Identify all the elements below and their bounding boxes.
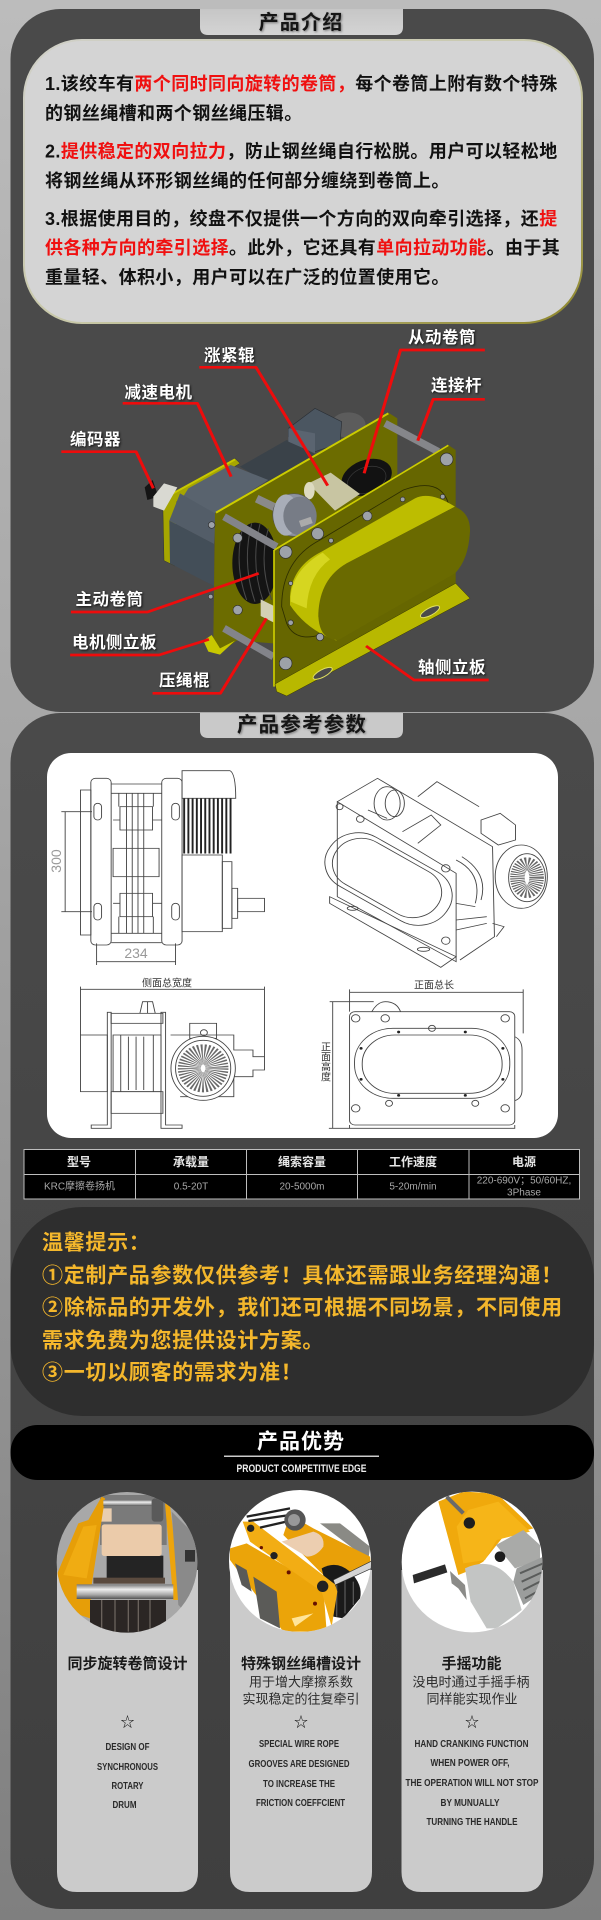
card: synchronous drums: ☆ (120, 1714, 134, 1730)
card: hand cranking: BY MUNUALLY (440, 1797, 500, 1809)
dimension labels: 正 (321, 1042, 331, 1054)
table: specifications: 型号 (67, 1155, 91, 1169)
card: hand cranking: WHEN POWER OFF, (430, 1757, 510, 1769)
table: specifications: 承载量 (173, 1154, 209, 1169)
part labels (70, 327, 486, 690)
callout: warm reminder: ③一切以顾客的需求为准！ (42, 1360, 302, 1384)
part labels: 压绳棍 (159, 671, 210, 690)
paragraph 2: 将钢丝绳从环形钢丝绳的任何部分缠绕到卷筒上。 (45, 170, 450, 191)
part labels: 从动卷筒 (408, 327, 476, 347)
card: hand cranking: 手摇功能 (441, 1654, 502, 1672)
card: wire rope grooves: GROOVES ARE DESIGNED (248, 1758, 350, 1770)
card: wire rope grooves: 实现稳定的往复牵引 (242, 1692, 360, 1706)
banner: product advantages: PRODUCT COMPETITIVE EDGE (236, 1463, 366, 1475)
photo 3: hand crank (400, 1490, 547, 1637)
side-view motor grille (189, 1054, 217, 1082)
plate bolts (208, 453, 453, 670)
dimension labels: 234 (124, 945, 148, 961)
table: specifications: 0.5-20T (174, 1182, 208, 1192)
drawing: side view (80, 987, 264, 1128)
dimension labels: 高 (321, 1060, 331, 1074)
part labels: 电机侧立板 (72, 632, 157, 652)
card: synchronous drums: ROTARY (112, 1780, 144, 1792)
table: specifications: 5-20m/min (389, 1182, 437, 1192)
drawing: isometric view (312, 778, 547, 967)
motor end plate (163, 458, 240, 566)
front side plate with foot (273, 445, 470, 696)
card: synchronous drums: 同步旋转卷筒设计 (67, 1654, 188, 1672)
drawing: front view (329, 989, 523, 1128)
tab: product parameters heading (200, 712, 403, 738)
card: synchronous drums (57, 1570, 198, 1892)
card: wire rope grooves: FRICTION COEFFCIENT (256, 1797, 345, 1809)
card: hand cranking: TURNING THE HANDLE (426, 1816, 518, 1828)
card: wire rope grooves: SPECIAL WIRE ROPE (259, 1738, 339, 1750)
dimension labels: 面 (321, 1052, 331, 1064)
card: wire rope grooves: ☆ (294, 1714, 308, 1730)
main drum (232, 523, 278, 604)
part labels: 编码器 (70, 429, 121, 449)
panel: product parameters and advantages (10, 712, 594, 1909)
gear cover (290, 496, 470, 641)
card: wire rope grooves (230, 1570, 372, 1892)
card: hand cranking: ☆ (465, 1714, 479, 1730)
tab: product introduction heading: 产品介绍 (259, 11, 343, 34)
banner: product advantages (10, 1425, 594, 1480)
rear side plate (203, 413, 397, 655)
rear drum (336, 452, 397, 503)
drawing: top view (61, 771, 264, 965)
table: specifications: KRC摩擦卷扬机 (44, 1180, 115, 1192)
paragraph 3: 供各种方向的牵引选择。此外，它还具有单向拉动功能。由于其 (45, 237, 560, 258)
dimension labels: 300 (48, 849, 64, 873)
banner: product advantages: 产品优势 (257, 1430, 345, 1454)
paragraph 3: 重量轻、体积小，用户可以在广泛的位置使用它。 (45, 266, 450, 288)
tab: product parameters heading: 产品参考参数 (237, 712, 367, 736)
card: wire rope grooves: TO INCREASE THE (263, 1778, 335, 1790)
card: synchronous drums: DRUM (112, 1799, 137, 1811)
callout: warm reminder (10, 1207, 594, 1416)
card: hand cranking: 没电时通过手摇手柄 (412, 1674, 530, 1690)
front-view flange bolts (360, 1031, 504, 1097)
paragraph 2: 2.提供稳定的双向拉力，防止钢丝绳自行松脱。用户可以轻松地 (45, 140, 558, 162)
callout: warm reminder: 需求免费为您提供设计方案。 (42, 1328, 324, 1352)
callout: warm reminder: ①定制产品参数仅供参考！具体还需跟业务经理沟通！ (42, 1264, 563, 1288)
dimension labels: 侧面总宽度 (142, 976, 192, 990)
card: technical drawings (47, 753, 558, 1138)
tab: product introduction heading (200, 9, 403, 35)
table: specifications: 3Phase (507, 1188, 541, 1198)
table: specifications: 20-5000m (279, 1182, 325, 1192)
photos: product close-ups (56, 1490, 542, 1633)
table: specifications: 绳索容量 (278, 1154, 326, 1169)
paragraph 1: 1.该绞车有两个同时同向旋转的卷筒，每个卷筒上附有数个特殊 (45, 73, 558, 94)
card: synchronous drums: SYNCHRONOUS (97, 1761, 158, 1773)
paragraph 2 (45, 140, 558, 191)
dimension labels (48, 849, 454, 1084)
part labels: 减速电机 (124, 383, 192, 402)
card: hand cranking: 同样能实现作业 (426, 1692, 518, 1706)
diagram: winch 3D model (144, 408, 470, 696)
part labels: 涨紧辊 (204, 346, 255, 365)
paragraph 3: 3.根据使用目的，绞盘不仅提供一个方向的双向牵引选择，还提 (45, 208, 558, 229)
table: specifications: 工作速度 (389, 1154, 437, 1169)
part labels: 主动卷筒 (76, 589, 144, 609)
card: hand cranking: HAND CRANKING FUNCTION (414, 1738, 528, 1750)
tension roller (304, 473, 360, 511)
text card: introduction paragraphs (24, 40, 582, 323)
connecting rods and press roller (224, 423, 438, 657)
card: hand cranking: THE OPERATION WILL NOT STOP (406, 1777, 538, 1789)
callout lines: part leaders (61, 348, 489, 695)
part labels: 连接杆 (431, 376, 482, 395)
paragraph 1: 的钢丝绳槽和两个钢丝绳压辑。 (45, 104, 303, 124)
paragraph 1 (45, 73, 558, 124)
pulley and shaft (257, 494, 317, 536)
motor cooling fins (183, 744, 233, 908)
dimension labels: 正面总长 (414, 978, 454, 992)
motor grille hatch (517, 864, 537, 892)
encoder (145, 480, 177, 511)
card: wire rope grooves: 用于增大摩擦系数 (249, 1674, 353, 1690)
callout: warm reminder: 温馨提示： (42, 1232, 150, 1254)
table: specifications (24, 1150, 580, 1199)
part labels: 轴侧立板 (418, 657, 486, 677)
photo 1: drums (56, 1492, 198, 1633)
card: synchronous drums: DESIGN OF (106, 1741, 150, 1753)
table: specifications: 电源 (512, 1154, 536, 1169)
gearmotor body (169, 465, 268, 586)
card: wire rope grooves: 特殊钢丝绳槽设计 (241, 1654, 361, 1672)
photo 2: grooves (227, 1488, 373, 1635)
gear cover flange outline (282, 486, 448, 637)
table: specifications: 220-690V；50/60HZ, (477, 1176, 571, 1186)
panel: product introduction (10, 9, 594, 712)
paragraph 3 (45, 208, 560, 288)
dimension labels: 度 (321, 1070, 331, 1084)
motor fan and terminal box (240, 408, 366, 483)
card: hand cranking (402, 1570, 543, 1892)
callout: warm reminder: ②除标品的开发外，我们还可根据不同场景，不同使用 (42, 1296, 563, 1320)
